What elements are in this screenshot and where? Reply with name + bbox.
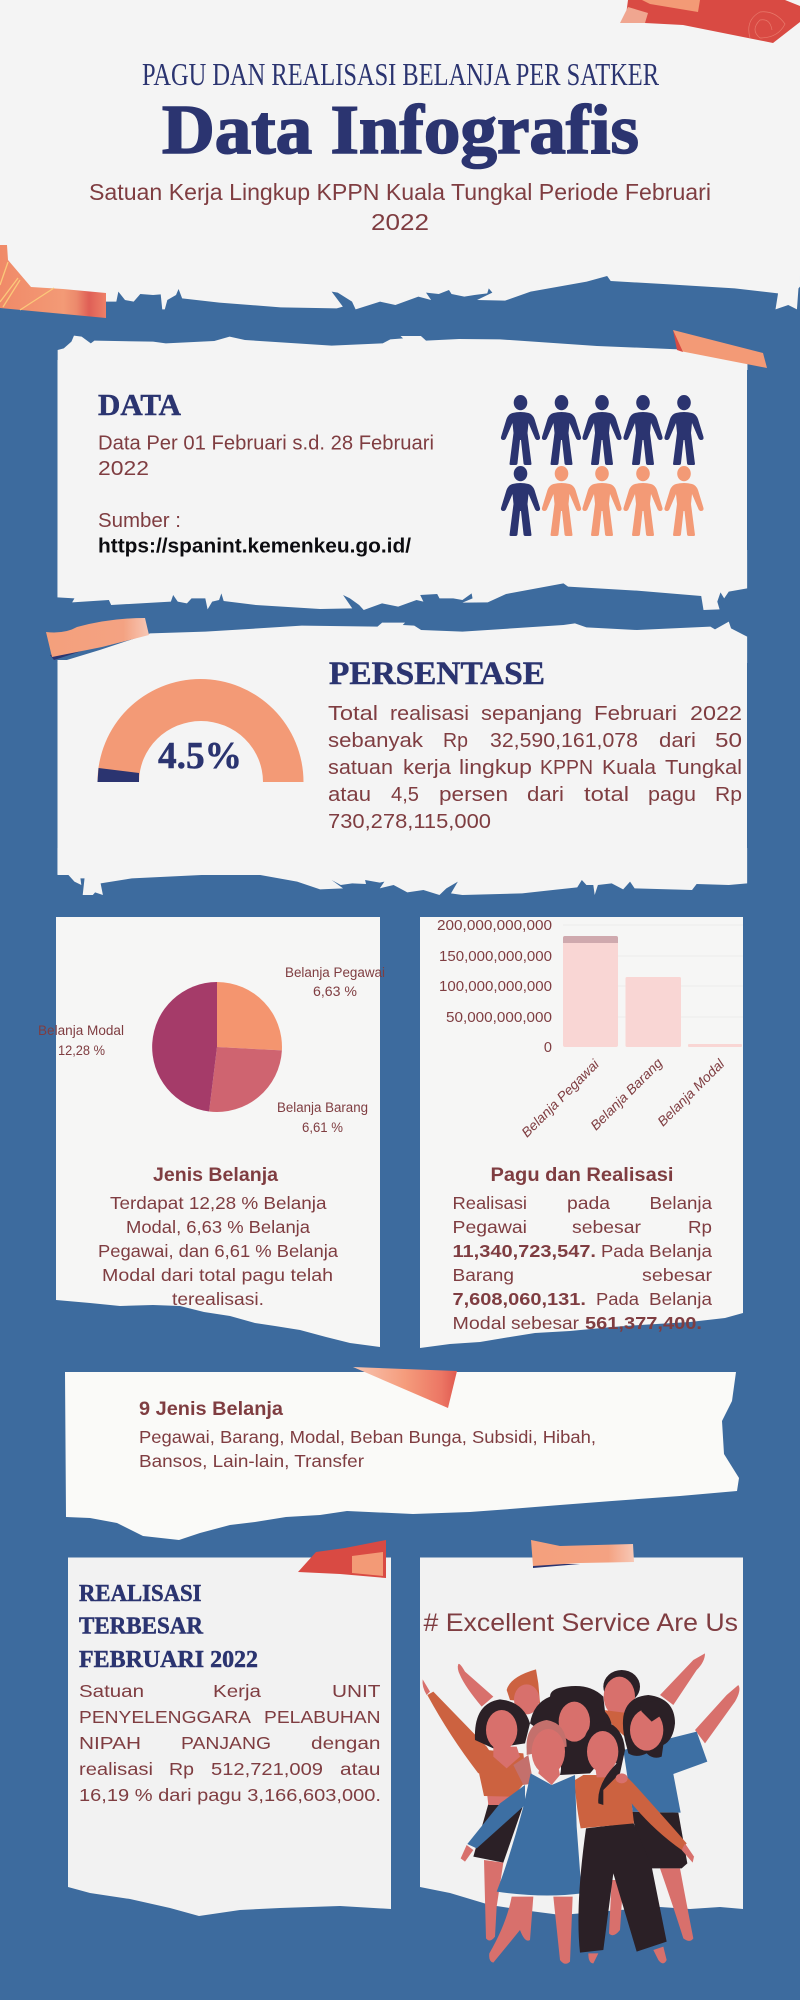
x axis labels: Belanja Barang	[588, 1055, 666, 1133]
text: persentase body: Februari	[594, 703, 677, 725]
center person	[530, 1686, 612, 1775]
heading: DATA: DATA	[98, 387, 182, 422]
text: persentase body: Tungkal	[665, 757, 742, 779]
title block	[89, 56, 711, 235]
panel: 9 jenis belanja	[65, 1367, 739, 1540]
text: realisasi body: atau	[340, 1759, 380, 1779]
text: persentase body: lingkup	[459, 757, 532, 779]
text: pagu body: Realisasi	[452, 1193, 527, 1213]
text: pagu body: 7,608,060,131.	[452, 1289, 586, 1309]
text: persentase body: kerja	[403, 757, 452, 779]
text: persentase body: persen	[439, 784, 508, 806]
text: pagu body: Belanja	[649, 1241, 712, 1261]
heading: realisasi terbesar	[79, 1581, 258, 1673]
text: pagu body: Modal	[452, 1313, 506, 1333]
text: pagu body: 561,377,400.	[585, 1313, 702, 1333]
pie chart	[38, 965, 385, 1135]
text: persentase body: KPPN	[540, 757, 593, 779]
y axis labels: 100,000,000,000	[439, 979, 552, 995]
text: period: 2022	[98, 458, 149, 480]
tape: realisasi red	[298, 1540, 386, 1578]
pie label: modal: 12,28 %	[58, 1043, 105, 1058]
bar chart	[437, 918, 743, 1140]
text: realisasi body: PENYELENGGARA	[79, 1707, 251, 1727]
text: persentase body: realisasi	[390, 703, 469, 725]
tape: panel persentase	[46, 618, 149, 660]
y axis labels	[437, 918, 552, 1056]
text: list of belanja: Bansos, Lain-lain, Transfer	[139, 1451, 364, 1471]
panel: persentase	[46, 618, 747, 895]
text: jenis belanja body: Terdapat 12,28 % Belanja	[110, 1193, 327, 1213]
text: persentase body: Rp	[715, 784, 742, 806]
heading: realisasi terbesar: REALISASI	[79, 1581, 202, 1607]
period line 2: 2022	[371, 209, 429, 235]
y axis labels: 50,000,000,000	[446, 1010, 552, 1026]
text: persentase body: sepanjang	[481, 703, 582, 725]
text: persentase body: Total	[328, 703, 378, 725]
text: persentase body: Kuala	[602, 757, 657, 779]
tape: panel 9 jenis	[353, 1367, 457, 1408]
heading: realisasi terbesar: TERBESAR	[79, 1614, 204, 1640]
text: realisasi body: Satuan	[79, 1681, 144, 1701]
front person in orange top	[575, 1722, 694, 1963]
text: pagu body: pada	[567, 1193, 610, 1213]
text: realisasi body: UNIT	[332, 1681, 381, 1701]
period line 1: Satuan Kerja Lingkup KPPN Kuala Tungkal Periode Februari	[89, 179, 711, 205]
text: list of belanja: Pegawai, Barang, Modal, Beban Bunga, Subsidi, Hibah,	[139, 1427, 596, 1447]
panel: realisasi terbesar	[68, 1540, 391, 1916]
text: realisasi body: 16,19 % dari pagu 3,166,603,000.	[79, 1785, 381, 1805]
text: persentase body: 50	[715, 730, 742, 752]
heading: pagu dan realisasi: Pagu dan Realisasi	[490, 1165, 674, 1186]
pie label: barang	[277, 1100, 368, 1135]
text: persentase body: pagu	[648, 784, 696, 806]
text: jenis belanja body: Pegawai, dan 6,61 % Belanja	[98, 1241, 338, 1261]
panel: excellent service	[420, 1540, 743, 1915]
front person in blue dress	[461, 1720, 582, 1964]
text: pagu body: Belanja	[649, 1289, 712, 1309]
text: persentase body: 730,278,115,000	[328, 811, 491, 833]
text: realisasi body: Kerja	[213, 1681, 261, 1701]
pie label: modal	[38, 1023, 124, 1058]
text: source	[98, 510, 411, 558]
back left person	[458, 1664, 540, 1714]
y axis labels: 0	[544, 1040, 552, 1056]
text: jenis belanja body: Modal dari total pagu telah	[102, 1265, 333, 1285]
pie label: barang: 6,61 %	[302, 1120, 343, 1135]
text: realisasi body: Rp	[169, 1759, 194, 1779]
tape: left peach	[0, 245, 106, 318]
text: pagu body: sebesar	[511, 1313, 579, 1333]
text: list of belanja	[139, 1427, 596, 1471]
x axis labels: Belanja Modal	[655, 1056, 728, 1129]
text: persentase body: dari	[527, 784, 564, 806]
text: pagu body: Pada	[601, 1241, 644, 1261]
text: persentase body: satuan	[328, 757, 393, 779]
text: persentase body: dari	[659, 730, 696, 752]
text: pagu body: 11,340,723,547.	[452, 1241, 596, 1261]
text: persentase body: total	[584, 784, 629, 806]
text: source: https://spanint.kemenkeu.go.id/	[98, 536, 411, 558]
text: pagu body: Belanja	[650, 1193, 712, 1213]
header paper with torn edge	[0, 0, 800, 309]
right person	[609, 1685, 739, 1941]
heading: 9 jenis belanja: 9 Jenis Belanja	[139, 1399, 283, 1420]
text: jenis belanja body: terealisasi.	[172, 1289, 264, 1309]
y axis labels: 150,000,000,000	[439, 949, 552, 965]
pie label: pegawai	[285, 965, 385, 999]
text: persentase body: sebanyak	[328, 730, 424, 752]
text: jenis belanja body	[98, 1193, 338, 1309]
heading: persentase: PERSENTASE	[329, 656, 545, 692]
y axis labels: 200,000,000,000	[437, 918, 552, 934]
text: pagu body: Rp	[688, 1217, 712, 1237]
text: pagu body: sebesar	[572, 1217, 641, 1237]
text: realisasi body: dengan	[311, 1733, 380, 1753]
heading: realisasi terbesar: FEBRUARI 2022	[79, 1647, 258, 1673]
text: persentase body: 2022	[690, 703, 742, 725]
text: persentase body: 32,590,161,078	[490, 730, 638, 752]
panel: jenis belanja	[38, 917, 385, 1347]
tape: excellent service	[531, 1540, 634, 1568]
text: period	[98, 432, 434, 480]
icon: people grid	[501, 395, 704, 536]
pie label: modal: Belanja Modal	[38, 1023, 124, 1038]
text: realisasi body: PANJANG	[181, 1733, 271, 1753]
gauge chart	[98, 679, 304, 782]
tape: top right red	[620, 0, 800, 43]
gauge value: 4.5%	[158, 735, 242, 777]
text: realisasi body: realisasi	[79, 1759, 153, 1779]
text: persentase body: atau	[328, 784, 371, 806]
text: pagu body: Pegawai	[452, 1217, 527, 1237]
text: excellent service: # Excellent Service Are Us	[424, 1609, 738, 1637]
text: realisasi body	[79, 1681, 381, 1805]
panel: data	[57, 330, 767, 610]
text: pagu body: Barang	[452, 1265, 514, 1285]
heading: jenis belanja: Jenis Belanja	[153, 1165, 278, 1186]
main title: Data Infografis	[162, 92, 639, 169]
text: pagu body	[452, 1193, 712, 1333]
x axis labels	[519, 1055, 728, 1140]
text: realisasi body: PELABUHAN	[264, 1707, 380, 1727]
panel: pagu dan realisasi	[420, 917, 743, 1348]
text: realisasi body: NIPAH	[79, 1733, 141, 1753]
subtitle heading: PAGU DAN REALISASI BELANJA PER SATKER	[142, 56, 660, 92]
pie label: pegawai: 6,63 %	[313, 984, 357, 999]
text: persentase body: 4,5	[391, 784, 419, 806]
x axis labels: Belanja Pegawai	[519, 1056, 603, 1140]
left person	[422, 1679, 530, 1940]
back right person	[603, 1653, 705, 1747]
text: realisasi body: 512,721,009	[211, 1759, 323, 1779]
text: pagu body: Pada	[596, 1289, 639, 1309]
text: pagu body: sebesar	[642, 1265, 712, 1285]
pie label: pegawai: Belanja Pegawai	[285, 965, 385, 980]
text: jenis belanja body: Modal, 6,63 % Belanja	[126, 1217, 310, 1237]
tape: panel data	[673, 330, 767, 368]
text: source: Sumber :	[98, 510, 181, 532]
pie label: barang: Belanja Barang	[277, 1100, 368, 1115]
text: persentase body: Rp	[443, 730, 468, 752]
text: period: Data Per 01 Februari s.d. 28 Februari	[98, 432, 434, 454]
illustration: group of women	[422, 1653, 739, 1964]
text: persentase body	[328, 703, 742, 833]
